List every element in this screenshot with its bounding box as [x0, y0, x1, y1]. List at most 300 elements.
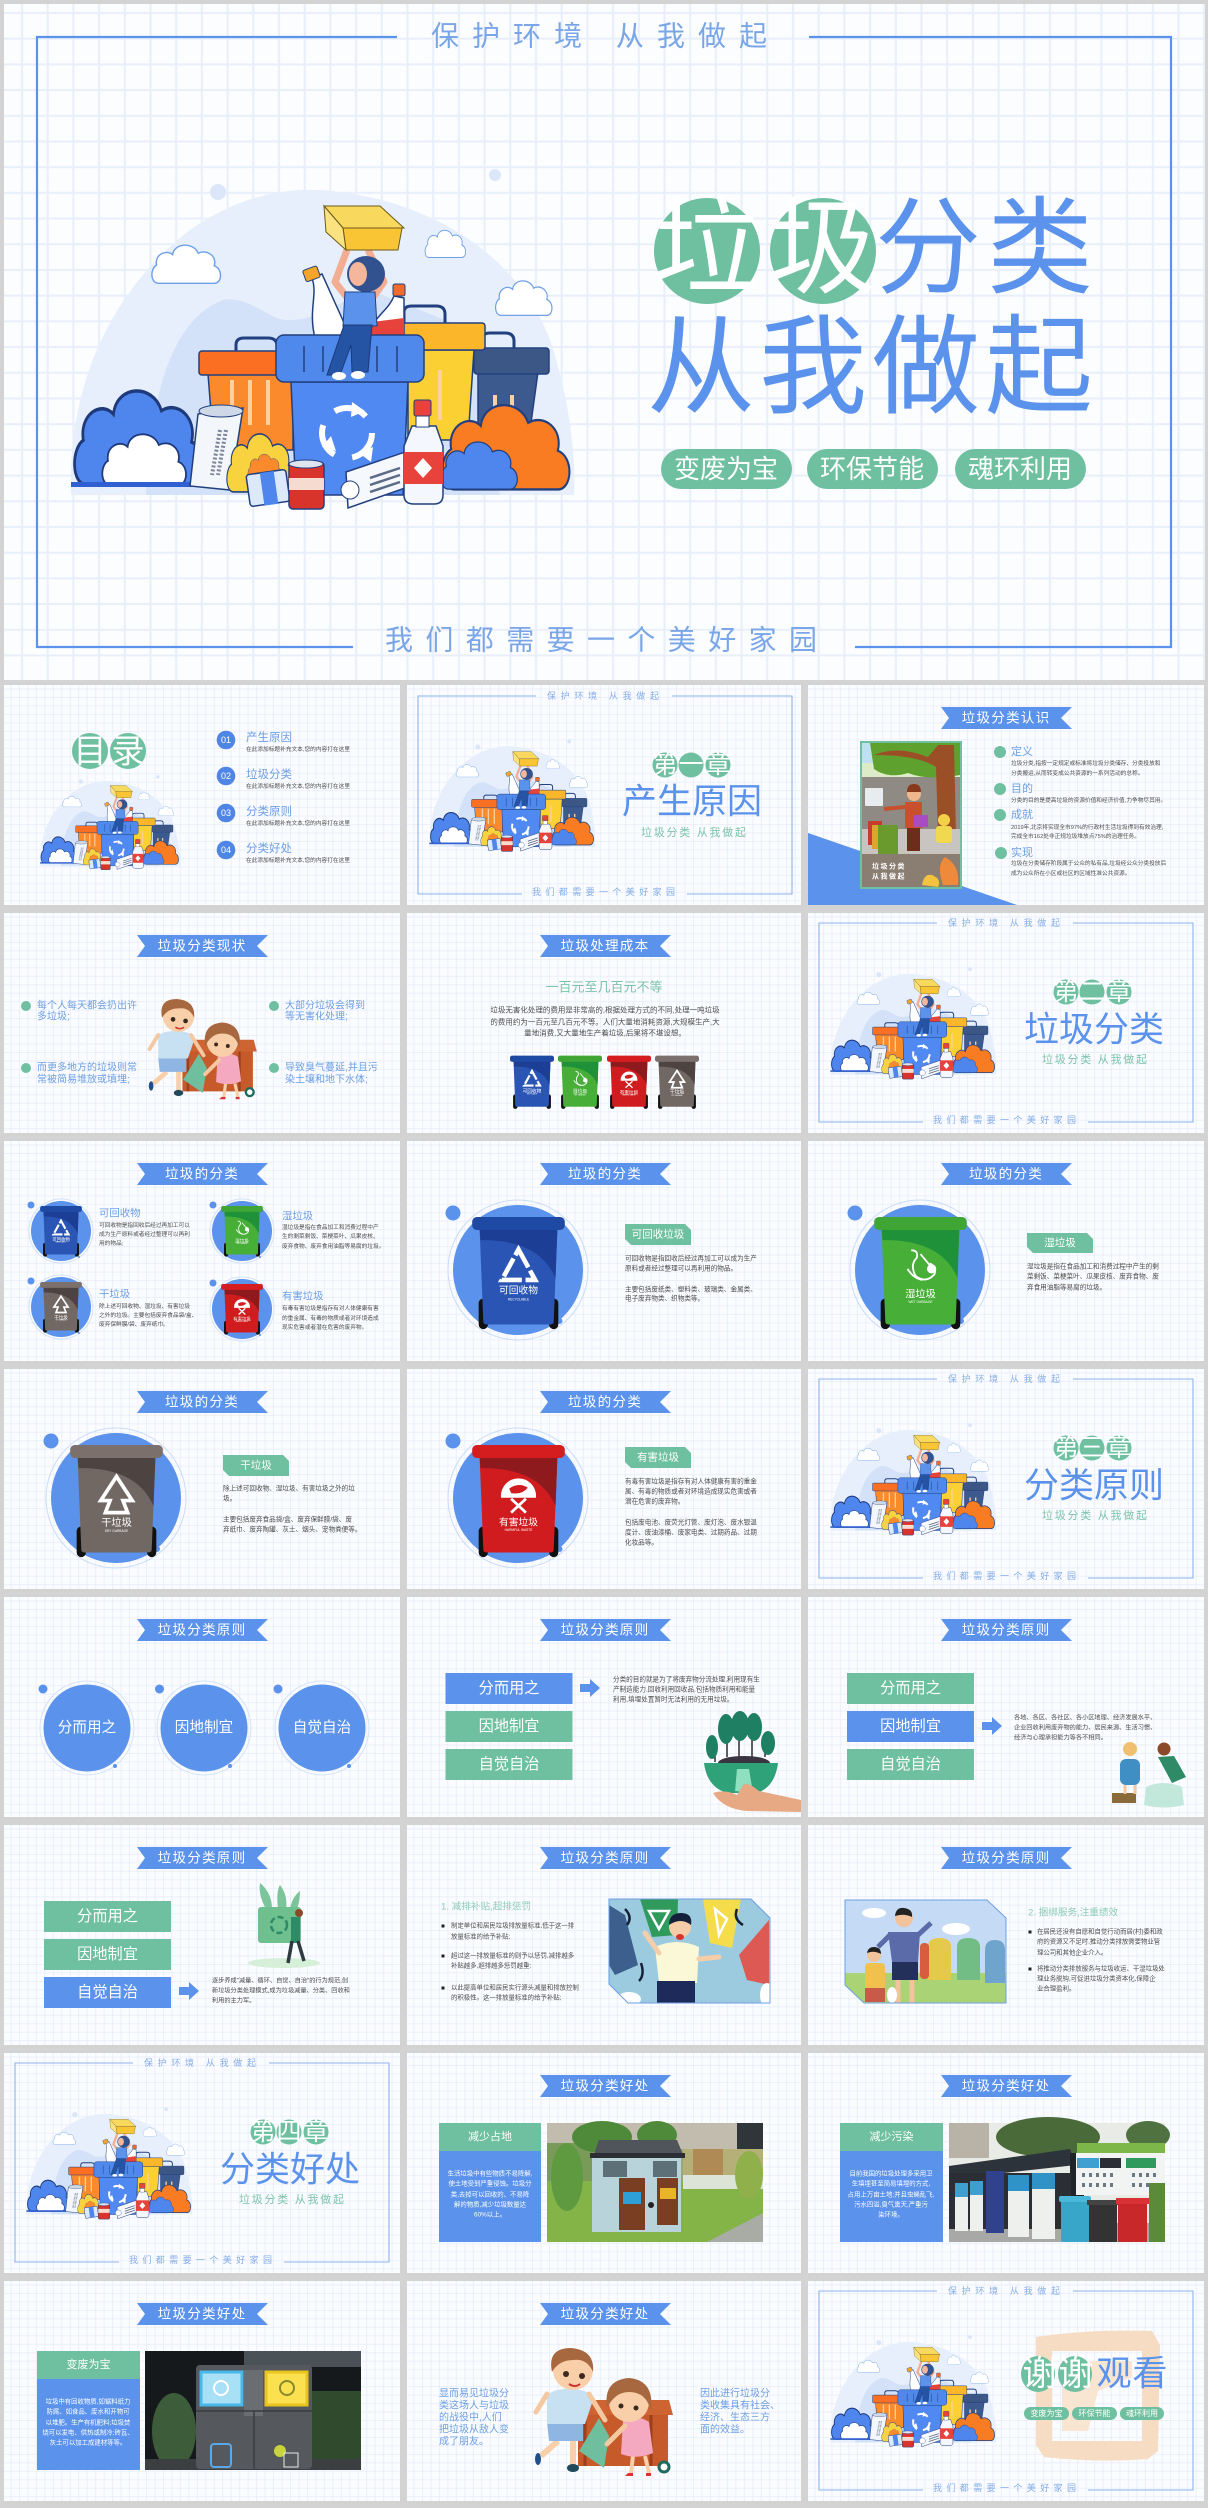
circle: 自觉自治 [274, 1681, 369, 1775]
paragraph: 量地消费,又大量地生产着垃圾,后果将不堪设想。 [524, 1028, 686, 1038]
description: 可回收物是指回收后经过再加工可以成为生产 [625, 1254, 757, 1262]
chapter badge: 第三章 [1053, 1434, 1132, 1462]
frame slogans: 我们都需要一个美好家园 [933, 1114, 1076, 1125]
banner heading [941, 1619, 1072, 1641]
frame slogans [933, 1373, 1076, 1581]
tag [1027, 1233, 1093, 1253]
item: 目的: 分类的目的是提高垃圾的资源价值和经济价值,力争物尽其用。 [1011, 796, 1166, 804]
description [223, 1484, 361, 1534]
bar: 分而用之 [44, 1901, 171, 1932]
description: 产制造能力,回收利用回收品,包括物质利用和能量 [613, 1684, 756, 1694]
item 01: 产生原因 [246, 730, 292, 744]
icon: red harmful bin [446, 1428, 588, 1568]
subheading: 1. 减排补贴,超排惩罚 [441, 1900, 531, 1912]
pill: 魂环利用 [1120, 2407, 1164, 2420]
banner heading [540, 935, 671, 957]
item 03: 03 [221, 808, 231, 818]
chapter title: 分类好处 [220, 2150, 360, 2190]
main title [647, 190, 1093, 428]
frame slogans [129, 2057, 272, 2265]
item 02 [217, 767, 350, 790]
description: 新垃圾分类处理模式,成为垃圾减量、分类、回收和 [212, 1986, 350, 1994]
pill: 魂环利用: 魂环利用 [968, 454, 1072, 484]
bar: 分而用之: 分而用之 [77, 1908, 138, 1925]
bar: 分而用之 [847, 1673, 974, 1704]
bar: 自觉自治 [847, 1749, 974, 1780]
bar: 因地制宜 [44, 1939, 171, 1970]
text right: 类收集具有社会、 [700, 2398, 780, 2412]
thank you title: 谢谢 [1022, 2354, 1094, 2394]
description: 除上述可回收物、湿垃圾、有害垃圾之外的垃 [223, 1484, 355, 1492]
pill: 变废为宝: 变废为宝 [674, 454, 778, 484]
illustration [429, 739, 595, 851]
description: 属、有毒的物质或者对环境造成现实危害或者 [625, 1486, 757, 1496]
frame [15, 2063, 389, 2262]
banner heading [941, 1847, 1072, 1869]
text: 湿垃圾: 生的剩菜剩饭、菜梗菜叶、瓜果皮核、 [282, 1232, 379, 1240]
photo: outdoor sorting station [547, 2121, 763, 2242]
text card: 生活垃圾中有些物质不易降解, [448, 2168, 533, 2178]
illustration [830, 2335, 996, 2447]
photo: smart sorting kiosks and bins [949, 2117, 1170, 2242]
item: 成就 [994, 807, 1164, 840]
item: 成就: 成就 [1011, 807, 1033, 821]
illustration: bins and woman [71, 169, 574, 509]
bullet 2: 补贴越多,超排越多惩罚越重; [451, 1960, 531, 1970]
banner heading: 垃圾分类认识 [962, 710, 1050, 726]
picture: man with bins [861, 742, 961, 888]
text left: 把垃圾从敌人变 [439, 2422, 509, 2436]
bin: dry [28, 1275, 93, 1339]
panel: chapter 4 cover [4, 2053, 400, 2273]
text card: 染环境。 [878, 2210, 904, 2218]
text card: 占用上万亩土地;并且虫蝇乱飞, [848, 2190, 935, 2198]
illustration: green can and leaves [248, 1883, 320, 1968]
banner heading: 垃圾分类原则 [158, 1850, 246, 1866]
bar: 因地制宜 [847, 1711, 974, 1742]
chapter title: 分类原则 [1024, 1466, 1164, 1506]
text left: 成了朋友。 [439, 2434, 489, 2448]
item: 定义 [994, 744, 1161, 777]
text card: 目前我国的垃圾处理多采用卫 [849, 2168, 933, 2178]
bullet 1: 府的资源又不足时,推动分类排放需要物业管 [1037, 1936, 1160, 1946]
panel: table of contents [4, 685, 400, 905]
bullet 3: 的积极性。这一排放量标准的给予补贴; [451, 1992, 562, 2002]
thank you title: 观看 [1096, 2354, 1168, 2394]
bin: harmful [210, 1277, 274, 1341]
paragraph: 垃圾无害化处理的费用是非常高的,根据处理方式的不同,处理一吨垃圾 [490, 1004, 720, 1014]
bullet 3 [442, 1982, 579, 2002]
panel: 湿垃圾 [808, 1141, 1204, 1361]
item: 目的 [994, 781, 1166, 804]
panel: chapter 1 cover [407, 685, 801, 905]
item 04: 04 [221, 845, 231, 855]
item 04: 在此添加标题补充文本,您的内容打在这里 [246, 856, 350, 864]
frame [418, 696, 792, 894]
banner heading: 垃圾的分类 [165, 1166, 239, 1182]
tag: 干垃圾 [240, 1458, 272, 1472]
description [625, 1254, 757, 1302]
bullet 1: 制定单位和居民垃圾排放量标准,低于这一排 [451, 1920, 575, 1930]
frame slogans [933, 2285, 1076, 2493]
title badges [654, 198, 876, 304]
chapter title: 垃圾分类 [1024, 1010, 1164, 1050]
panel: 干垃圾 [4, 1369, 400, 1589]
description: 化妆品等。 [625, 1538, 658, 1546]
banner heading [137, 1163, 268, 1185]
text left: 的战役中,人们 [439, 2410, 502, 2424]
description: 弃食用油脂等易腐的垃圾。 [1027, 1282, 1106, 1292]
subheading: 一百元至几百元不等 [545, 980, 663, 994]
tag: 湿垃圾 [1044, 1236, 1076, 1249]
text card: 类,去掉可以回收的、不易降 [451, 2190, 530, 2198]
text card [37, 2379, 140, 2470]
icon: blue recyclable bin [446, 1200, 588, 1340]
circle: 因地制宜 [155, 1681, 251, 1775]
text: 干垃圾: 废弃保鲜膜/袋、废弃纸巾。 [99, 1320, 169, 1328]
main title: 分类 [875, 190, 1093, 308]
panel: 垃圾的分类 overview [4, 1141, 400, 1361]
frame slogans: 保护环境 从我做起 [948, 917, 1060, 928]
bar: 分而用之 [446, 1673, 572, 1704]
text right: 面的效益。 [700, 2422, 750, 2436]
text card: 生填埋甚至简易填埋的方式, [852, 2178, 930, 2188]
panel: thank you [808, 2281, 1204, 2501]
bar: 自觉自治: 自觉自治 [479, 1756, 539, 1773]
banner heading: 垃圾分类原则 [561, 1850, 649, 1866]
item: 实现 [995, 845, 1166, 877]
arrow [982, 1717, 1002, 1735]
panel: 减少占地 [407, 2053, 801, 2273]
header card: 减少占地 [468, 2129, 512, 2143]
description: 潜在危害的废弃物。 [625, 1496, 684, 1506]
tag [223, 1455, 289, 1476]
frame [37, 37, 1171, 647]
pill: 环保节能 [1072, 2407, 1117, 2420]
illustration [26, 2107, 192, 2219]
description: 包括废电池、废荧光灯管、废灯泡、废水银温 [625, 1518, 757, 1526]
pill: 变废为宝: 变废为宝 [1030, 2408, 1062, 2418]
description: 各地、各区、各社区、各小区地理、经济发展水平、 [1014, 1714, 1156, 1722]
text: 湿垃圾 [282, 1210, 384, 1250]
text: 可回收物: 可回收物 [99, 1206, 141, 1220]
panel: 有害垃圾 [407, 1369, 801, 1589]
main title: 从我做起 [647, 306, 1093, 428]
frame slogans: 我们都需要一个美好家园 [129, 2254, 272, 2265]
paragraph: 的费用约为一百元至几百元不等。人们大量地消耗资源,大规模生产,大 [490, 1016, 720, 1026]
point: bottom right [269, 1060, 378, 1086]
banner heading: 垃圾分类原则 [962, 1622, 1050, 1638]
text left: 类这场人与垃圾 [439, 2398, 509, 2412]
banner heading: 垃圾分类好处 [561, 2078, 649, 2094]
panel: 因地制宜 detail [808, 1597, 1204, 1817]
frame slogans: 我们都需要一个美好家园 [933, 2482, 1076, 2493]
illustration: hand holding trees [704, 1711, 801, 1812]
bar: 因地制宜 [446, 1711, 572, 1742]
tag: 可回收垃圾 [632, 1228, 685, 1240]
frame slogans: 我们都需要一个美好家园 [933, 1570, 1076, 1581]
description: 主要包括废纸类、塑料类、玻璃类、金属类、 [625, 1284, 757, 1294]
point: bottom right: 染土壤和地下水体; [285, 1072, 368, 1086]
item 03 [217, 804, 350, 827]
banner heading [137, 2303, 268, 2325]
bullet 1: 在居民还没有自愿和自觉行动而居(村)委和政 [1037, 1926, 1163, 1936]
item: 实现: 垃圾在分类储存阶段属于公众的私有品,垃圾经公众分类投放后 [1011, 859, 1166, 867]
illustration [830, 967, 996, 1079]
stamp [1036, 2331, 1160, 2461]
banner heading [540, 1619, 671, 1641]
top slogan: 保护环境 从我做起 [431, 20, 767, 52]
banner heading [137, 1391, 268, 1413]
icon: green wet bin [848, 1200, 990, 1340]
illustration: children sorting [1112, 1742, 1186, 1808]
icon: grey dry bin [44, 1428, 186, 1568]
chapter subtitle: 垃圾分类 从我做起 [1042, 1508, 1147, 1522]
banner heading [941, 2075, 1072, 2097]
chapter title: 产生原因 [622, 782, 762, 822]
point: top left [21, 998, 137, 1022]
banner heading: 垃圾的分类 [969, 1166, 1043, 1182]
panel: 人与垃圾 [407, 2281, 801, 2501]
description [212, 1976, 350, 2004]
banner heading [137, 1619, 268, 1641]
bullet 1: 放量标准的给予补贴; [451, 1932, 511, 1940]
bullet 2 [1028, 1964, 1165, 1992]
item 02: 垃圾分类 [246, 767, 292, 781]
four bins [510, 1056, 699, 1109]
frame slogans: 保护环境 从我做起 [547, 690, 659, 701]
description: 逐步养成"减量、循环、自觉、自治"的行为规范,创 [212, 1976, 348, 1984]
pill: 魂环利用: 魂环利用 [1126, 2408, 1158, 2418]
text card: 60%以上。 [474, 2210, 506, 2218]
illustration: kids and bin [149, 999, 257, 1099]
banner heading [137, 1847, 268, 1869]
circle: 因地制宜: 因地制宜 [175, 1719, 233, 1736]
pill: 环保节能: 环保节能 [820, 454, 924, 484]
panel: 三个原则 circles [4, 1597, 400, 1817]
panel: chapter 2 cover [808, 913, 1204, 1133]
header card: 变废为宝 [66, 2357, 110, 2371]
pill: 环保节能 [807, 449, 938, 489]
panel: hero cover slide [4, 4, 1205, 680]
frame slogans [933, 917, 1076, 1125]
description: 电子废弃物类、织物类等。 [625, 1294, 704, 1302]
description: 利用的主力军。 [212, 1996, 255, 2004]
frame [819, 1379, 1193, 1578]
description: 圾。 [223, 1494, 236, 1502]
text right [700, 2386, 780, 2436]
tag: 有害垃圾 [637, 1450, 679, 1464]
panel: 变废为宝 [4, 2281, 400, 2501]
chapter badge: 第四章 [250, 2118, 329, 2146]
text: 可回收物: 成为生产原料或者经过整理可以再利 [99, 1230, 190, 1238]
stamp inner mark [1062, 2361, 1132, 2431]
text: 可回收物 [99, 1206, 190, 1247]
chapter badge: 第二章 [1053, 978, 1132, 1006]
photo: dark sorting machine [145, 2351, 361, 2470]
text: 干垃圾: 除上述可回收物、湿垃圾、有害垃圾 [99, 1302, 190, 1310]
banner heading [540, 2303, 671, 2325]
frame slogans: 保护环境 从我做起 [948, 2285, 1060, 2296]
point: bottom right: 导致臭气蔓延,并且污 [285, 1060, 378, 1074]
description: 分类的目的就是为了将废弃物分流处理,利用现有生 [613, 1674, 760, 1684]
text card: 污水四溢,臭气熏天,严重污 [854, 2200, 929, 2208]
banner heading [540, 2075, 671, 2097]
bar: 自觉自治: 自觉自治 [880, 1756, 941, 1773]
text right: 经济、生态三方 [700, 2410, 770, 2424]
bottom slogan: 我们都需要一个美好家园 [385, 624, 817, 656]
frame slogans [532, 690, 675, 897]
illustration [40, 775, 180, 870]
description: 弃纸巾、废弃陶罐、灰土、烟头、宠物粪便等。 [223, 1524, 361, 1534]
bullet 2: 理业务脱钩,可促进垃圾分类资本化,保障企 [1037, 1974, 1156, 1982]
text: 可回收物: 可回收物是指回收后经过再加工可以 [99, 1221, 190, 1229]
bullet 1 [1028, 1926, 1163, 1956]
thank you title [1022, 2354, 1168, 2394]
panel: 自觉自治 detail [4, 1825, 400, 2045]
illustration: kids and bin [535, 2348, 673, 2476]
description: 经济与心理承担能力等各不相同。 [1014, 1734, 1107, 1742]
banner heading [540, 1391, 671, 1413]
banner heading [941, 707, 1072, 729]
text left: 显而易见垃圾分 [439, 2386, 509, 2400]
text: 有害垃圾: 有毒有害垃圾是指存有对人体健康有害 [282, 1304, 379, 1312]
banner heading: 垃圾分类现状 [158, 938, 246, 954]
bar: 因地制宜: 因地制宜 [479, 1718, 539, 1735]
banner heading: 垃圾的分类 [568, 1166, 642, 1182]
text card: 垃圾中有回收物质,如锯料纸力 [46, 2396, 130, 2406]
item 04 [217, 841, 350, 864]
chapter subtitle: 垃圾分类 从我做起 [239, 2192, 344, 2206]
arrow [179, 1982, 199, 2000]
bar: 分而用之: 分而用之 [479, 1680, 539, 1697]
text card: 以堆肥。生产有机肥料;垃圾焚 [46, 2418, 131, 2426]
text: 干垃圾: 之外的垃圾。主要包括废弃食品袋/盒、 [99, 1311, 197, 1319]
bar: 因地制宜: 因地制宜 [880, 1718, 941, 1735]
pill: 变废为宝 [1024, 2407, 1069, 2420]
text: 有害垃圾: 的重金属、有毒的物质或者对环境造成 [282, 1314, 379, 1322]
text card: 烧可以发电、供热或制冷;砖瓦、 [42, 2428, 134, 2436]
text: 湿垃圾: 湿垃圾 [282, 1210, 314, 1222]
item: 定义: 分类搬运,从而转变成公共资源的一系列活动的总称。 [1011, 769, 1143, 777]
header card [439, 2123, 541, 2151]
description: 原料或者经过整理可以再利用的物品。 [625, 1264, 737, 1272]
point: bottom left [21, 1060, 137, 1086]
point: top right: 大部分垃圾会得到 [285, 998, 365, 1012]
chapter subtitle: 垃圾分类 从我做起 [1042, 1052, 1147, 1066]
panel: 减少污染 [808, 2053, 1204, 2273]
banner heading: 垃圾分类原则 [561, 1622, 649, 1638]
circle: 分而用之 [38, 1681, 134, 1775]
item: 成就: 完成全市162处非正规垃圾堆放点75%的治理任务。 [1011, 832, 1140, 840]
panel: 垃圾处理成本 [407, 913, 801, 1133]
text: 湿垃圾: 废弃食物、废弃食用油脂等易腐的垃圾。 [282, 1242, 384, 1250]
bar: 因地制宜: 因地制宜 [77, 1946, 138, 1963]
item: 定义: 定义 [1011, 744, 1033, 758]
bar: 分而用之: 分而用之 [880, 1680, 941, 1697]
description [613, 1674, 760, 1704]
text: 湿垃圾: 湿垃圾是指在食品加工和消费过程中产 [282, 1223, 379, 1231]
chapter subtitle: 垃圾分类 从我做起 [641, 825, 746, 839]
item 04: 分类好处 [246, 841, 292, 855]
point: top right [269, 998, 365, 1022]
text card [840, 2151, 943, 2242]
point: top left: 每个人每天都会扔出许 [37, 998, 137, 1012]
description: 菜剩饭、菜梗菜叶、瓜果皮核、废弃食物、废 [1027, 1272, 1159, 1280]
description [1014, 1714, 1156, 1742]
text: 有害垃圾: 有害垃圾 [282, 1290, 324, 1302]
banner heading: 垃圾处理成本 [561, 938, 649, 954]
bin: recyclable [28, 1199, 93, 1263]
subheading: 2. 捆绑服务,注重绩效 [1028, 1906, 1118, 1918]
picture: man with bins: 垃圾分类 [872, 862, 906, 870]
header card [37, 2351, 140, 2379]
frame slogans: 保护环境 从我做起 [144, 2057, 256, 2068]
item: 定义: 垃圾分类,指按一定规定或标准将垃圾分类储存、分类投放和 [1011, 759, 1161, 767]
item 02: 02 [221, 771, 231, 781]
text card: 防腐、如食品、废水和开物可 [46, 2406, 130, 2416]
bullet 2: 超过这一排放量标准的则予以惩罚,减排越多 [451, 1950, 575, 1960]
item 03: 分类原则 [246, 804, 292, 818]
bin: wet [210, 1199, 274, 1263]
picture: man and child with bins [845, 1900, 1006, 2004]
point: bottom left: 而更多地方的垃圾则常 [37, 1060, 137, 1074]
panel: chapter 3 cover [808, 1369, 1204, 1589]
pill: 环保节能: 环保节能 [1078, 2408, 1110, 2418]
text: 可回收物: 用的物品; [99, 1239, 124, 1247]
description: 度计、废油漆桶、废家电类、过期药品、过期 [625, 1528, 757, 1536]
panel: 减排补贴 [407, 1825, 801, 2045]
description: 利用,填埋处置暂时无法利用的无用垃圾。 [613, 1694, 734, 1704]
tag [625, 1224, 691, 1245]
bullet 1 [442, 1920, 575, 1940]
panel: 可回收垃圾 [407, 1141, 801, 1361]
description: 企业回收利用废弃物的能力、居民来源、生活习惯、 [1014, 1724, 1156, 1732]
circle: 自觉自治: 自觉自治 [293, 1719, 351, 1736]
description [625, 1476, 757, 1546]
frame slogans: 我们都需要一个美好家园 [532, 886, 675, 897]
corner triangle [808, 833, 1017, 905]
circle: 分而用之: 分而用之 [58, 1719, 117, 1736]
item: 目的: 目的 [1011, 781, 1033, 795]
bar: 自觉自治: 自觉自治 [77, 1984, 138, 2001]
banner heading [540, 1847, 671, 1869]
header card [840, 2123, 943, 2151]
panel: 分而用之 detail [407, 1597, 801, 1817]
item 03: 在此添加标题补充文本,您的内容打在这里 [246, 819, 350, 827]
panel: 垃圾分类现状 [4, 913, 400, 1133]
bullet 2: 业合理盈利。 [1037, 1984, 1075, 1992]
text: 有害垃圾 [282, 1290, 379, 1331]
item: 实现: 成为公众所在小区或社区的区域性准公共资源。 [1011, 869, 1130, 877]
panel: 捆绑服务 [808, 1825, 1204, 2045]
banner heading: 垃圾分类好处 [561, 2306, 649, 2322]
header card: 减少污染 [870, 2129, 914, 2143]
pill: 变废为宝 [661, 449, 792, 489]
text card: 解的物质,减少垃圾数量达 [454, 2200, 527, 2208]
picture: man and sorting flags [609, 1899, 774, 2007]
banner heading: 垃圾的分类 [568, 1394, 642, 1410]
item: 实现: 实现 [1011, 845, 1033, 859]
banner heading [941, 1163, 1072, 1185]
banner heading [137, 935, 268, 957]
text: 干垃圾 [99, 1288, 197, 1328]
bar: 自觉自治 [446, 1749, 572, 1780]
item 01: 在此添加标题补充文本,您的内容打在这里 [246, 745, 350, 753]
banner heading [540, 1163, 671, 1185]
point: top right: 等无害化处理; [285, 1010, 348, 1022]
item 02: 在此添加标题补充文本,您的内容打在这里 [246, 782, 350, 790]
